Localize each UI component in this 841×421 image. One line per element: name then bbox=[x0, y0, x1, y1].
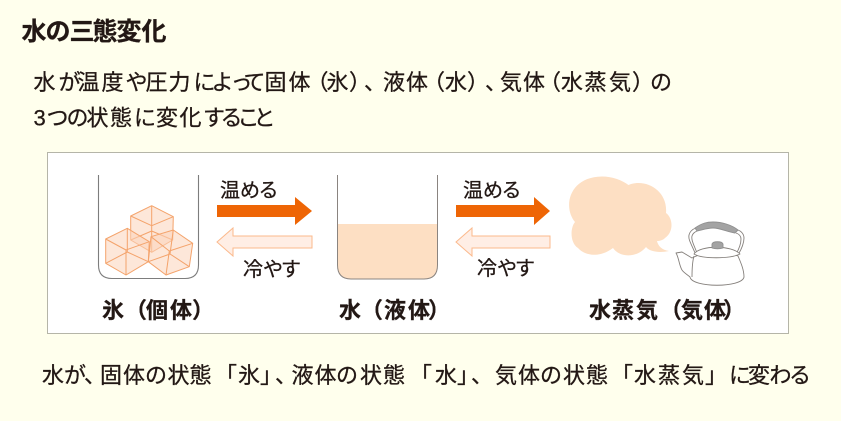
label: water: 水（液体） bbox=[339, 298, 450, 323]
icon: kettle bbox=[676, 222, 744, 285]
arrow: cool 1: 冷やす bbox=[243, 258, 301, 281]
label: steam: 水蒸気（気体） bbox=[589, 298, 745, 323]
icon: liquid water in glass bbox=[338, 175, 438, 279]
arrow: cool 1 bbox=[217, 228, 312, 281]
arrow: warm 1 bbox=[217, 179, 312, 225]
summary text: 水が、固体の状態「氷」、液体の状態「水」、気体の状態「水蒸気」に変わる bbox=[42, 363, 811, 388]
arrow: cool 2 bbox=[456, 228, 550, 280]
title: 水の三態変化 bbox=[22, 18, 167, 46]
arrow: warm 2: 温める bbox=[463, 179, 522, 202]
intro text: 3つの状態に変化すること bbox=[34, 106, 276, 130]
arrow: cool 2: 冷やす bbox=[477, 257, 535, 280]
label: ice: 氷（個体） bbox=[102, 298, 214, 323]
panel: states of water diagram bbox=[48, 152, 788, 334]
intro text: 水が温度や圧力によって固体（氷）、液体（水）、気体（水蒸気）の bbox=[34, 70, 672, 95]
intro text bbox=[34, 70, 672, 130]
icon: steam cloud bbox=[569, 176, 672, 255]
arrow: warm 1: 温める bbox=[220, 179, 278, 202]
icon: ice cubes in glass bbox=[98, 175, 198, 278]
arrow: warm 2 bbox=[456, 179, 550, 225]
